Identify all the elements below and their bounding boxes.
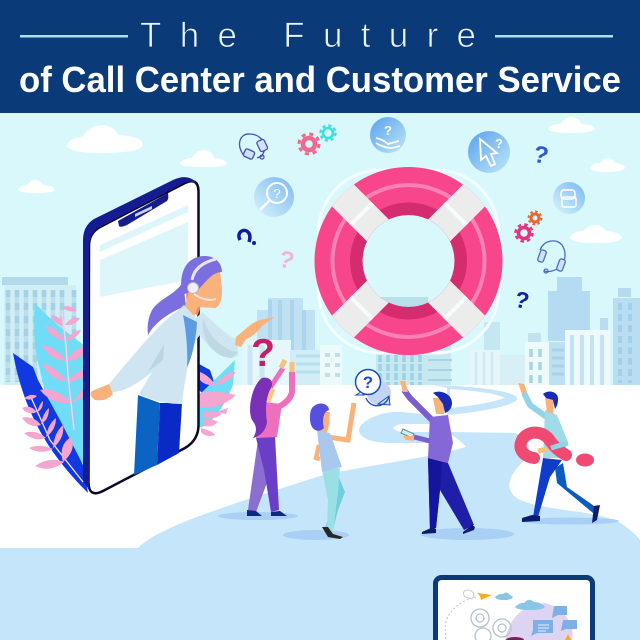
icon: cursor question: ?: [495, 136, 503, 151]
smartphone: [83, 177, 198, 493]
phone notch: [118, 193, 168, 227]
woman hair: [250, 378, 272, 438]
bottom illustration card: [436, 578, 592, 640]
icon: chat question: [553, 182, 585, 214]
agent neck and face: [186, 290, 205, 315]
title lines: [20, 35, 613, 38]
card gears: [471, 609, 511, 640]
left foliage: [13, 303, 88, 493]
icon: hand question: ?: [384, 123, 392, 138]
woman hair: [310, 403, 329, 431]
agent hands: [91, 384, 113, 400]
phone screen panels: [100, 205, 188, 252]
man head: [545, 398, 554, 414]
man torso: [428, 415, 453, 463]
man shoes: [422, 525, 475, 534]
ground shadows: [218, 512, 619, 540]
woman torso: [256, 402, 282, 438]
title: of Call Center and Customer Service: of Call Center and Customer Service: [19, 59, 621, 100]
man raised arm: [404, 390, 434, 422]
icon: headset left: [240, 134, 268, 160]
agent trousers: [134, 395, 160, 475]
woman shoes: [322, 527, 343, 539]
icon: pink gear: [299, 134, 319, 154]
woman arm: [328, 403, 354, 440]
icon: orange gear: [528, 212, 542, 224]
agent headset: [192, 259, 216, 280]
woman with raised arms: [247, 360, 292, 516]
woman in blue top: [310, 403, 354, 539]
question mark: dark blue hook: [239, 230, 256, 245]
man raised arm: [524, 393, 548, 418]
speech bubbles: [356, 370, 391, 406]
man with phone: [400, 381, 475, 534]
man phone: [401, 429, 414, 438]
man torso: [543, 410, 568, 458]
question mark: blue upper: ?: [531, 141, 551, 170]
red question mark prop: [520, 433, 566, 458]
agent undershirt: [183, 315, 197, 367]
life buoy: [318, 170, 498, 353]
agent hair: [181, 256, 222, 295]
card clouds: [495, 592, 513, 600]
woman top: [317, 430, 342, 472]
man trousers: [555, 463, 597, 513]
icon: headset right: [537, 241, 566, 273]
woman legs: [325, 468, 345, 530]
agent shirt: [109, 305, 238, 404]
woman face: [320, 412, 330, 433]
right foliage: [199, 360, 236, 436]
question mark: navy lower: ?: [512, 286, 532, 314]
icon: cursor question: [468, 131, 510, 173]
icon: hand question: [370, 117, 406, 153]
card purple blob: [505, 603, 573, 640]
header band: [0, 0, 640, 113]
icon: magenta gear: [516, 224, 532, 242]
winding path and blue foreground: [0, 385, 640, 640]
card dashed flight path: [445, 597, 476, 640]
man carrying question mark: [518, 383, 600, 523]
card chat bubbles: [531, 606, 577, 636]
man hand and sleeve: [551, 443, 568, 448]
woman legs: [248, 440, 272, 512]
buoy glow frame: [318, 170, 498, 353]
question mark: magenta: ?: [251, 332, 275, 375]
white ground: [0, 385, 640, 560]
card paper plane: [477, 593, 492, 600]
card maroon figure: [506, 637, 524, 640]
city skyline: [2, 277, 640, 388]
icon: magnifier question: ?: [273, 186, 281, 201]
man shoes: [522, 505, 600, 523]
man head: [433, 398, 445, 414]
woman shoes: [247, 510, 287, 516]
floating icons: [239, 117, 585, 375]
question mark: light pink: ?: [276, 245, 297, 275]
agent ponytail: [148, 282, 186, 335]
icon: magnifier question: [254, 177, 294, 217]
woman face: [265, 385, 275, 403]
woman arms: [276, 372, 292, 408]
speech bubbles: ?: [363, 373, 373, 392]
sky background: [0, 113, 640, 388]
call center agent: [91, 256, 275, 475]
man trousers: [428, 458, 474, 530]
title: The Future: The Future: [140, 16, 476, 55]
icon: cyan gear: [320, 126, 336, 140]
clouds: [18, 117, 625, 243]
